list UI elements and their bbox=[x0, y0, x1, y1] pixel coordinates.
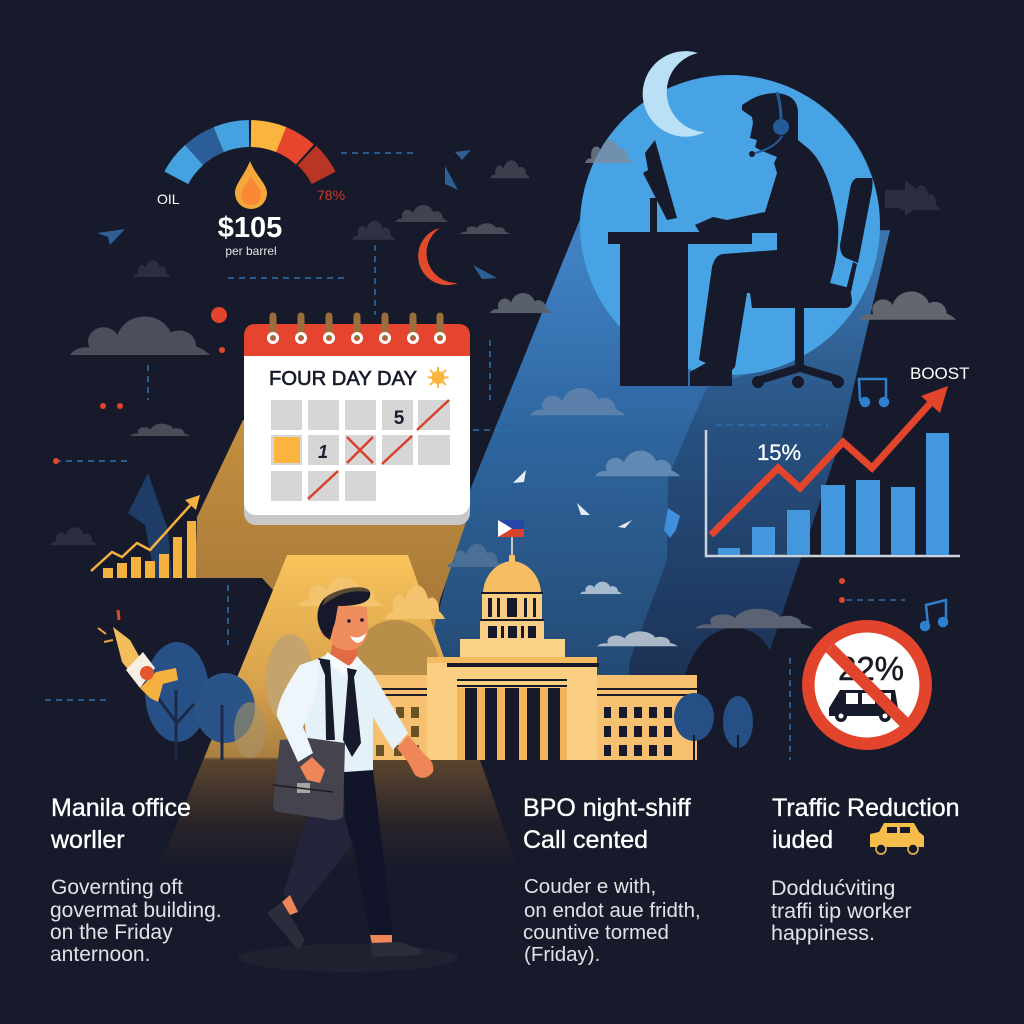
crescent moon, light bbox=[643, 51, 705, 137]
dark tree mass on blue bbox=[678, 628, 780, 760]
no-traffic sign bbox=[808, 626, 926, 744]
calendar header bbox=[244, 324, 470, 356]
text: Manila office worker bbox=[50, 794, 222, 966]
heading: Traffic Reduction bbox=[772, 794, 960, 822]
bars bbox=[718, 433, 949, 555]
red strikes bbox=[308, 400, 449, 499]
sun icon bbox=[428, 367, 448, 388]
text: BPO night-shift call center bbox=[523, 794, 701, 966]
shoes bbox=[267, 902, 305, 950]
oil percent: 78% bbox=[317, 187, 345, 203]
columns bbox=[465, 688, 560, 760]
chair bbox=[760, 178, 872, 384]
calendar bbox=[244, 316, 470, 525]
body: on the Friday bbox=[50, 921, 173, 944]
oil drop icon bbox=[235, 161, 267, 209]
main block bbox=[427, 657, 597, 760]
head bbox=[326, 605, 368, 650]
wings bbox=[372, 675, 697, 760]
body: Governting oft bbox=[51, 876, 183, 899]
text: traffic reduction bbox=[771, 794, 960, 945]
neck bbox=[330, 645, 357, 668]
day 5: 5 bbox=[394, 408, 405, 429]
body: (Friday). bbox=[524, 943, 600, 966]
ground shadow bbox=[238, 944, 458, 972]
calendar page bbox=[244, 325, 470, 515]
eyes and smile bbox=[347, 619, 351, 623]
capitol building bbox=[372, 520, 697, 760]
body: govermat building. bbox=[50, 899, 222, 922]
blue mountain behind small chart bbox=[128, 473, 172, 578]
messenger bag bbox=[273, 738, 345, 820]
day 1: 1 bbox=[318, 442, 328, 462]
right arrow icon bbox=[885, 180, 930, 216]
calendar title: FOUR DAY DAY bbox=[269, 368, 417, 390]
car silhouette bbox=[829, 690, 898, 722]
blue note on beam bbox=[664, 508, 680, 538]
heading: Manila office bbox=[51, 794, 191, 822]
hands bbox=[300, 757, 325, 783]
heading: iuded bbox=[772, 826, 833, 854]
calendar grid bbox=[271, 400, 450, 501]
chart percent: 15% bbox=[757, 440, 801, 465]
gold spotlight beam behind calendar bbox=[195, 420, 470, 650]
background clouds bbox=[50, 160, 956, 646]
icon: yellow car bbox=[870, 823, 924, 854]
calendar shadow bbox=[244, 335, 470, 525]
desk bbox=[608, 232, 752, 386]
finial bbox=[509, 555, 515, 564]
front leg bbox=[343, 770, 393, 937]
body: Couder e with, bbox=[524, 875, 656, 898]
dome bbox=[483, 561, 541, 592]
blue trees right of building bbox=[674, 693, 753, 761]
music note icons bbox=[859, 379, 947, 630]
body: countive tormed bbox=[523, 921, 669, 944]
sign disc bbox=[808, 626, 926, 744]
person bbox=[690, 93, 852, 386]
headset bbox=[749, 92, 788, 157]
body: Doddućviting bbox=[771, 876, 895, 900]
collar bbox=[325, 652, 362, 677]
shirt torso bbox=[300, 654, 408, 772]
blue spotlight beam bbox=[400, 170, 890, 760]
left small trend chart bbox=[91, 495, 200, 578]
heading: worller bbox=[50, 826, 125, 854]
boost label: BOOST bbox=[910, 364, 970, 383]
oil label: OIL bbox=[157, 191, 180, 207]
body: anternoon. bbox=[50, 943, 150, 966]
ankle bbox=[282, 895, 392, 944]
calendar rings bbox=[268, 316, 444, 342]
right bar chart bbox=[706, 364, 970, 556]
red crescent bbox=[418, 228, 458, 285]
red trend arrow bbox=[711, 398, 935, 535]
dashed connectors and dots bbox=[45, 153, 905, 760]
heading: BPO night-shiff bbox=[523, 794, 691, 822]
red dots bbox=[53, 307, 845, 603]
bag strap bbox=[318, 658, 335, 740]
body: traffi tip worker bbox=[771, 899, 912, 923]
base bbox=[460, 639, 565, 658]
left arm bbox=[277, 660, 320, 762]
cloud over circle bbox=[585, 140, 632, 163]
chart axes bbox=[706, 430, 960, 556]
call-center agent silhouette bbox=[608, 93, 872, 388]
gold spotlight beam behind worker bbox=[158, 555, 518, 870]
windows bbox=[376, 707, 419, 756]
flag bbox=[498, 520, 524, 557]
monitor bbox=[643, 140, 677, 232]
small birds and decorative marks bbox=[97, 150, 497, 279]
hair bbox=[317, 587, 370, 640]
per barrel: per barrel bbox=[225, 244, 277, 258]
heading: Call cented bbox=[523, 826, 648, 854]
tie bbox=[343, 668, 361, 757]
body: happiness. bbox=[771, 921, 875, 945]
blue circle behind call-center agent bbox=[580, 75, 880, 375]
22 percent: 22% bbox=[838, 650, 904, 687]
oil price: $105 bbox=[218, 212, 282, 244]
trees left of worker bbox=[145, 642, 266, 760]
pencil rocket icon bbox=[98, 610, 178, 702]
body: on endot aue fridth, bbox=[524, 899, 701, 922]
highlighted day bbox=[274, 437, 300, 463]
oil gauge bbox=[176, 134, 324, 178]
office worker bbox=[238, 587, 458, 972]
white birds bbox=[513, 470, 632, 528]
gold scene clouds and hills bbox=[266, 577, 445, 726]
drum bbox=[482, 593, 542, 621]
back leg bbox=[283, 800, 352, 913]
sign slash bbox=[830, 648, 906, 724]
